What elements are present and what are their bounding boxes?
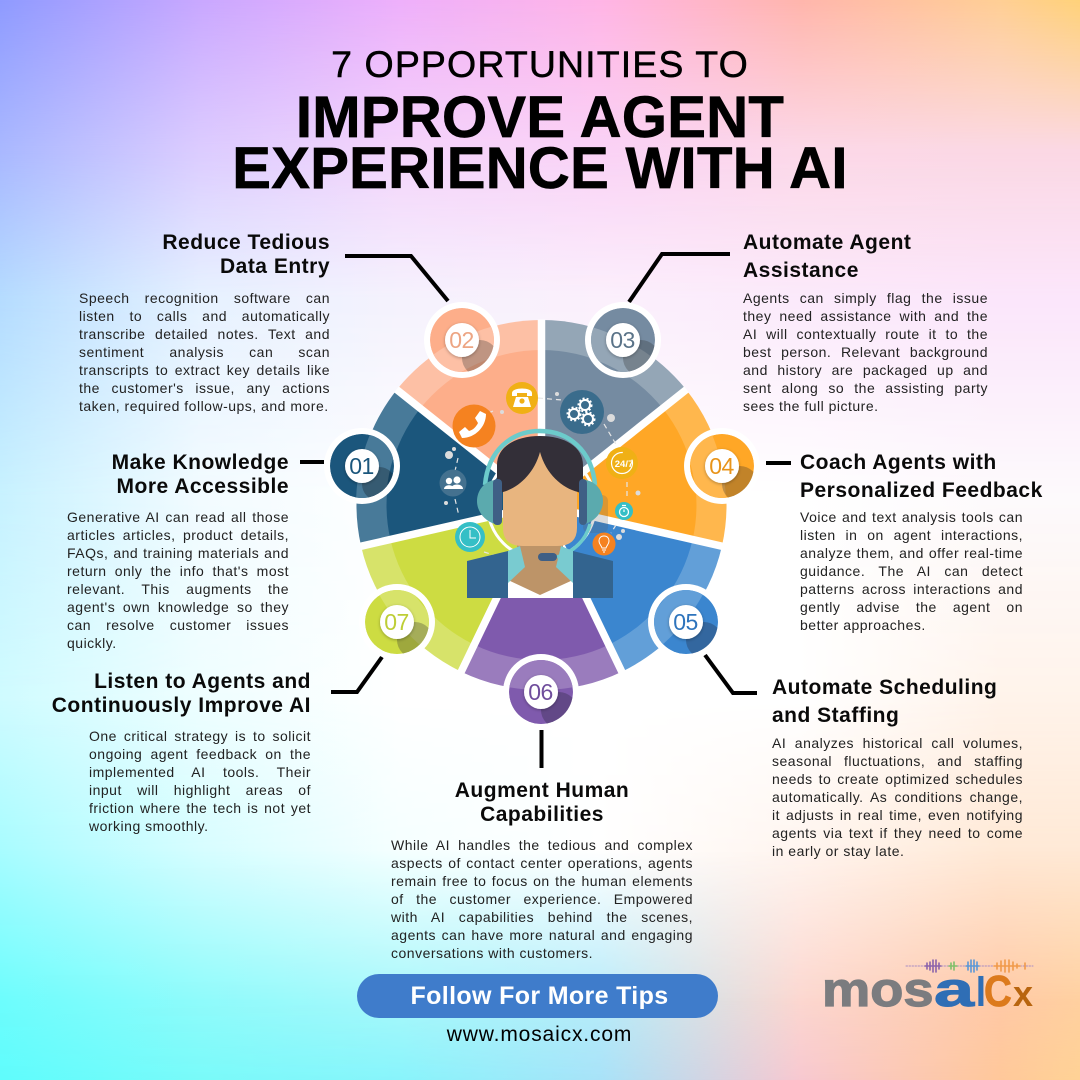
text block: 02 Reduce Tedious Data Entry [79, 231, 330, 414]
text block: 05 Automate Scheduling: automatically. As conditions change, [772, 789, 1023, 805]
icon: 24/7 [606, 447, 638, 479]
badge 03 [585, 302, 661, 378]
text block: 04 Coach Agents [800, 451, 1043, 633]
headset shadow [583, 495, 608, 533]
text block: 01 Make Knowledge More Accessible: agent's own knowledge so they [67, 599, 289, 615]
badge 07: 07 [384, 609, 409, 635]
text block: 05 Automate Scheduling: Automate Scheduling [772, 676, 997, 699]
segment 07 [361, 505, 542, 672]
title: 7 OPPORTUNITIES TO [331, 43, 749, 85]
icon: clock [455, 522, 485, 552]
text block: 04 Coach Agents: Coach Agents with [800, 451, 997, 474]
text block: 03 Automate Agent Assistance: they need assistance with and the [743, 308, 988, 324]
text block: 01 Make Knowledge More Accessible: return only the info that's most [67, 563, 289, 579]
face [503, 452, 577, 546]
badge 04 [684, 430, 754, 504]
text block: 07 Listen to Agents: friction where the tech is not yet [89, 800, 311, 816]
badge 07 [365, 584, 435, 658]
text block: 07 Listen to Agents: input will highlight areas of [89, 782, 311, 798]
badge 02: 02 [449, 327, 474, 353]
text block: 03 Automate Agent Assistance: Assistance [743, 259, 859, 282]
headband [485, 431, 595, 485]
text block: 01 Make Knowledge More Accessible: quickly. [67, 635, 117, 651]
text block: 04 Coach Agents: better approaches. [800, 617, 926, 633]
connector lines [300, 254, 791, 768]
logo: mosaicx: mos [822, 963, 934, 1016]
text block: 03 Automate Agent Assistance: Automate Agent [743, 231, 911, 254]
dashed links and dots [444, 392, 640, 556]
segment 06 [461, 505, 622, 690]
text block: 07 Listen to Agents: working smoothly. [89, 818, 209, 834]
text block: 06 Augment Human Capabilities: agents can have more natural and engaging [391, 927, 693, 943]
logo: mosaicx: a [934, 963, 975, 1016]
text block: 04 Coach Agents: Personalized Feedback [800, 479, 1043, 502]
text block: 07 Listen to Agents [52, 670, 311, 834]
text block: 07 Listen to Agents: Continuously Improve AI [52, 694, 311, 717]
icon: telephone [506, 382, 538, 414]
segment 03 [542, 320, 686, 505]
text block: 05 Automate Scheduling: agents via text if they need to come [772, 825, 1023, 841]
text block: 05 Automate Scheduling: AI analyzes historical call volumes, [772, 735, 1023, 751]
icon: 24/7: 24/7 [615, 459, 633, 470]
badge 01: 01 [349, 453, 374, 479]
text block: 01 Make Knowledge More Accessible [67, 451, 289, 651]
badge 03: 03 [610, 327, 635, 353]
title: IMPROVE AGENT [296, 85, 784, 150]
text block: 02 Reduce Tedious Data Entry: listen to calls and automatically [79, 308, 330, 324]
text block: 05 Automate Scheduling: in early or stay late. [772, 843, 904, 859]
text block: 06 Augment Human Capabilities [391, 779, 693, 961]
text block: 01 Make Knowledge More Accessible: Make Knowledge [112, 451, 289, 474]
text block: 04 Coach Agents: guidance. The AI can detect [800, 563, 1023, 579]
text block: 03 Automate Agent Assistance: AI will contextually route it to the [743, 326, 988, 342]
text block: 03 Automate Agent Assistance: sent along so the assisting party [743, 380, 988, 396]
badge 05: 05 [673, 609, 698, 635]
jacket [467, 551, 508, 598]
text block: 02 Reduce Tedious Data Entry: Speech recognition software can [79, 290, 330, 306]
badge 02 [424, 302, 500, 378]
text block: 01 Make Knowledge More Accessible: relevant. This augments the [67, 581, 289, 597]
logo: mosaicx: C [984, 967, 1012, 1016]
text block: 06 Augment Human Capabilities: remain free to focus on the human elements [391, 873, 693, 889]
badge 06 [504, 654, 578, 724]
collar [508, 546, 525, 583]
icon: people [440, 470, 466, 496]
segment 04 [542, 390, 727, 546]
text block: 02 Reduce Tedious Data Entry: taken, required follow-ups, and more. [79, 398, 329, 414]
text block: 05 Automate Scheduling: and Staffing [772, 704, 899, 727]
text block: 06 Augment Human Capabilities: Capabilities [480, 803, 604, 826]
badge 05 [648, 584, 718, 656]
text block: 03 Automate Agent Assistance: sees the full picture. [743, 398, 879, 414]
hair [497, 436, 583, 495]
text block: 03 Automate Agent Assistance [743, 231, 988, 414]
text block: 01 Make Knowledge More Accessible: can resolve customer issues [67, 617, 289, 633]
microphone arm [557, 524, 590, 557]
text block: 03 Automate Agent Assistance: Agents can simply flag the issue [743, 290, 988, 306]
neck [508, 538, 573, 595]
icon: light bulb [592, 532, 616, 556]
icon: gears [560, 390, 604, 434]
badge 01 [330, 430, 400, 504]
text block: 01 Make Knowledge More Accessible: FAQs, and training materials and [67, 545, 289, 561]
text block: 04 Coach Agents: Voice and text analysis tools can [800, 509, 1023, 525]
text block: 03 Automate Agent Assistance: and history are packaged up and [743, 362, 988, 378]
text block: 02 Reduce Tedious Data Entry: Reduce Tedious [162, 231, 330, 254]
logo: mosaicx [822, 960, 1033, 1016]
text block: 04 Coach Agents: analyze them, and offer real-time [800, 545, 1023, 561]
text block: 06 Augment Human Capabilities: with AI capabilities behind the scenes, [391, 909, 693, 925]
text block: 06 Augment Human Capabilities: conversations with customers. [391, 945, 593, 961]
text block: 07 Listen to Agents: One critical strategy is to solicit [89, 728, 311, 744]
segment 01 [356, 390, 542, 546]
text block: 02 Reduce Tedious Data Entry: transcribe detailed notes. Text and [79, 326, 330, 342]
text block: 02 Reduce Tedious Data Entry: Data Entry [220, 255, 330, 278]
text block: 07 Listen to Agents: ongoing agent feedback on the [89, 746, 311, 762]
text block: 05 Automate Scheduling: it adjusts in real time, even notifying [772, 807, 1023, 823]
text block: 05 Automate Scheduling: seasonal fluctuations, and staffing [772, 753, 1023, 769]
website url: www.mosaicx.com [447, 1023, 632, 1046]
text block: 06 Augment Human Capabilities: While AI handles the tedious and complex [391, 837, 693, 853]
microphone [538, 553, 557, 561]
segment 05 [542, 505, 722, 672]
title [232, 43, 848, 201]
logo: mosaicx: I [976, 967, 986, 1016]
text block: 01 Make Knowledge More Accessible: Generative AI can read all those [67, 509, 289, 525]
text block: 06 Augment Human Capabilities: aspects of contact center operations, agents [391, 855, 693, 871]
badge 06: 06 [528, 679, 553, 705]
text block: 02 Reduce Tedious Data Entry: sentiment analysis can scan [79, 344, 330, 360]
icon: handset [452, 404, 496, 448]
button: follow for more tips: Follow For More Tips [411, 982, 668, 1010]
ear cups [477, 480, 495, 524]
logo: mosaicx: x [1013, 973, 1033, 1014]
text block: 04 Coach Agents: patterns across interactions and [800, 581, 1023, 597]
text block: 05 Automate Scheduling [772, 676, 1023, 859]
segment 02 [397, 320, 542, 505]
text block: 03 Automate Agent Assistance: best person. Relevant background [743, 344, 988, 360]
text block: 02 Reduce Tedious Data Entry: the customer's issue, any actions [79, 380, 330, 396]
icon: stopwatch [615, 502, 633, 520]
text block: 01 Make Knowledge More Accessible: articles articles, product details, [67, 527, 289, 543]
text block: 04 Coach Agents: gently advise the agent on [800, 599, 1023, 615]
badge 04: 04 [709, 453, 734, 479]
text block: 01 Make Knowledge More Accessible: More Accessible [117, 475, 289, 498]
text block: 04 Coach Agents: listen in on agent interactions, [800, 527, 1023, 543]
text block: 06 Augment Human Capabilities: of the customer experience. Empowered [391, 891, 693, 907]
text block: 05 Automate Scheduling: needs to create optimized schedules [772, 771, 1023, 787]
text block: 07 Listen to Agents: Listen to Agents and [94, 670, 311, 693]
button: follow for more tips [357, 974, 718, 1018]
shirt [508, 578, 573, 598]
text block: 02 Reduce Tedious Data Entry: transcripts to extract key details like [79, 362, 330, 378]
agent illustration [467, 431, 613, 598]
logo sound wave [906, 960, 1033, 972]
text block: 06 Augment Human Capabilities: Augment Human [455, 779, 629, 802]
wheel of seven segments [356, 320, 727, 690]
title: EXPERIENCE WITH AI [232, 136, 848, 201]
text block: 07 Listen to Agents: implemented AI tools. Their [89, 764, 311, 780]
